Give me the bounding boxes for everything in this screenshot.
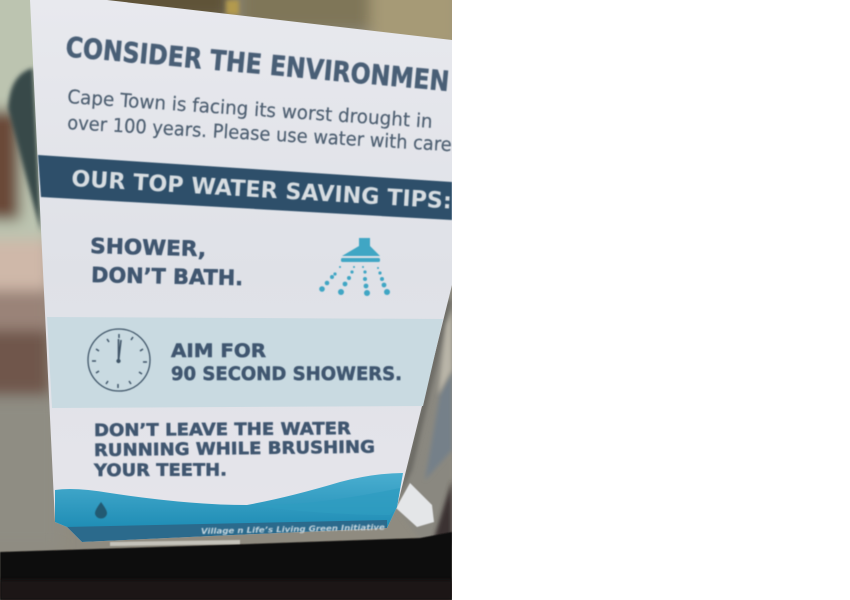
tip 2: aim for 90 second showers: AIM FOR — [171, 340, 266, 362]
banner: our top water saving tips — [38, 155, 452, 220]
icon: water drop — [95, 502, 107, 518]
sign card — [30, 0, 452, 542]
tip 3: don't leave the water running: RUNNING WHILE BRUSHING — [94, 438, 375, 461]
icon: shower head — [319, 238, 390, 296]
tip 2: aim for 90 second showers — [170, 342, 402, 382]
dark base — [0, 532, 452, 600]
photo background — [0, 0, 460, 600]
intro text: Cape Town is facing its worst drought in — [67, 86, 433, 133]
intro text: over 100 years. Please use water with care — [67, 112, 452, 156]
tip 1: shower, don't bath — [90, 236, 242, 286]
dark object left of the card — [8, 68, 41, 232]
icon: clock — [88, 329, 150, 391]
tip 2: aim for 90 second showers: 90 SECOND SHOWERS. — [171, 363, 402, 385]
footer credit: Village n Life’s Living Green Initiative — [201, 523, 386, 536]
banner: our top water saving tips: OUR TOP WATER SAVING TIPS: — [71, 167, 452, 215]
tip 3: don't leave the water running: YOUR TEETH. — [93, 461, 227, 481]
wave footer — [55, 473, 403, 542]
tip 3: don't leave the water running — [93, 419, 375, 481]
tip 1: shower, don't bath: SHOWER, — [90, 234, 206, 261]
tip 1: shower, don't bath: DON’T BATH. — [91, 263, 243, 290]
tip 2 band — [47, 317, 443, 408]
tip 3: don't leave the water running: DON’T LEAVE THE WATER — [94, 419, 351, 441]
heading: consider the environment: CONSIDER THE ENVIRONMEN — [64, 30, 451, 98]
intro text — [67, 86, 452, 156]
acrylic stand edge — [396, 298, 452, 545]
